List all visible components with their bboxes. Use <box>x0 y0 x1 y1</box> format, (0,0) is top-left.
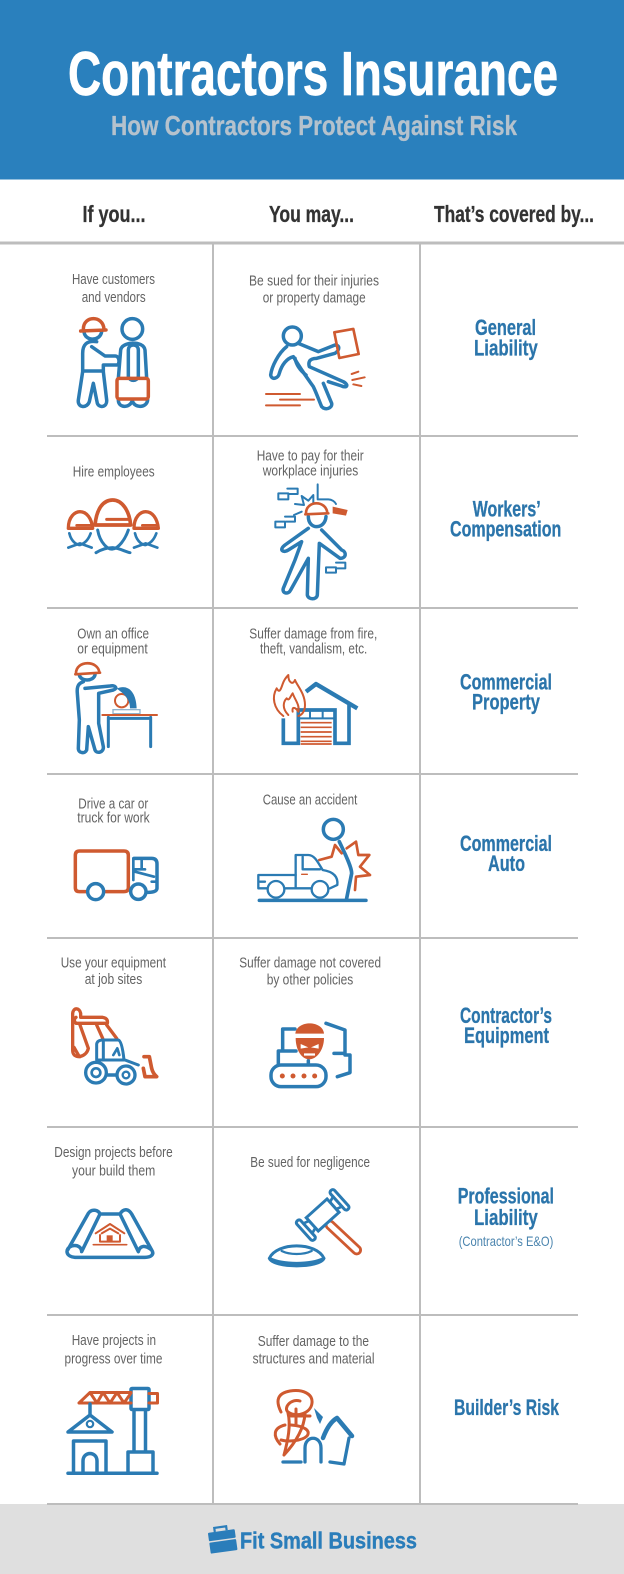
text: have projects: progress over time <box>64 1351 162 1367</box>
icon: slipping person with briefcase <box>266 327 365 409</box>
heading: contractors equipment <box>460 1003 552 1048</box>
heading: commercial auto: Commercial <box>460 831 552 856</box>
row: professional liability <box>54 1145 554 1266</box>
text: suffer damage not covered: by other policies <box>267 972 353 988</box>
icon: burning garage <box>274 675 357 744</box>
heading: professional liability: Professional <box>458 1183 554 1208</box>
heading: professional liability: Liability <box>474 1205 538 1230</box>
text: own an office: Own an office <box>77 627 149 643</box>
heading: general liability <box>474 315 538 361</box>
heading: commercial auto: Auto <box>488 851 525 876</box>
heading: builders risk: Builder’s Risk <box>454 1395 560 1420</box>
column headings: If you... <box>82 201 146 227</box>
text: use your equipment <box>61 956 166 988</box>
row: workers compensation <box>68 449 561 599</box>
heading: commercial property: Property <box>472 690 541 714</box>
icon: three helmeted workers <box>68 500 158 553</box>
text: own an office <box>77 627 149 657</box>
text: be sued: or property damage <box>263 291 366 307</box>
text: own an office: or equipment <box>77 641 148 657</box>
text: suffer damage from fire: theft, vandalism, etc. <box>260 641 367 657</box>
text: suffer damage from fire: Suffer damage from fire, <box>249 626 377 642</box>
text: have customers: and vendors <box>82 290 146 306</box>
icon: delivery truck <box>75 851 157 900</box>
text: design projects: your build them <box>72 1164 155 1180</box>
text: suffer damage not covered: Suffer damage not covered <box>239 956 381 972</box>
column headings: You may... <box>269 201 354 227</box>
icon: worker hit by brick <box>275 484 348 599</box>
text: drive a car: Drive a car or <box>78 796 148 812</box>
text: have to pay <box>257 449 364 480</box>
subtitle: How Contractors Protect Against Risk <box>111 110 517 141</box>
icon: gavel <box>269 1189 357 1266</box>
icon: thief and bulldozer <box>271 1023 350 1087</box>
footer logo text: Fit Small Business <box>240 1528 417 1554</box>
text: hire employees: Hire employees <box>73 465 155 481</box>
row: builders risk <box>64 1333 560 1473</box>
row: general liability <box>72 272 538 409</box>
heading: contractors equipment: Contractor’s <box>460 1003 552 1028</box>
text: suffer damage to structures: Suffer damage to the <box>258 1334 369 1350</box>
icon: handshake with client <box>78 319 148 406</box>
text: be sued <box>249 274 379 307</box>
heading: workers compensation: Compensation <box>450 517 561 542</box>
text: suffer damage not covered <box>239 956 381 988</box>
text: have to pay: Have to pay for their <box>257 449 364 465</box>
icon: pickup hitting pedestrian <box>258 819 370 900</box>
text: design projects: Design projects before <box>54 1145 173 1161</box>
heading: contractors equipment: Equipment <box>464 1023 549 1048</box>
heading: workers compensation <box>450 497 561 542</box>
heading: commercial property: Commercial <box>460 670 552 695</box>
heading: general liability: General <box>475 315 536 340</box>
text: be sued: Be sued for their injuries <box>249 274 379 290</box>
text: have projects <box>64 1333 162 1367</box>
text: be sued for negligence: Be sued for negligence <box>250 1155 370 1171</box>
text: use your equipment: Use your equipment <box>61 956 166 972</box>
heading: professional liability: (Contractor’s E&O) <box>459 1233 553 1249</box>
text: design projects <box>54 1145 173 1180</box>
icon: tornado and damaged house <box>275 1391 352 1464</box>
text: have to pay: workplace injuries <box>262 464 358 480</box>
column headings <box>82 201 594 227</box>
row: commercial auto <box>75 792 552 900</box>
row: commercial property <box>75 626 552 753</box>
heading: general liability: Liability <box>474 336 538 361</box>
icon: backhoe <box>73 1009 157 1084</box>
heading: commercial property <box>460 670 552 714</box>
text: suffer damage to structures <box>253 1334 374 1367</box>
text: have customers <box>72 272 155 306</box>
heading: professional liability <box>458 1183 554 1249</box>
icon: worker at table saw <box>75 663 157 753</box>
footer band <box>0 1504 624 1574</box>
text: cause an accident: Cause an accident <box>263 792 357 808</box>
heading: commercial auto <box>460 831 552 876</box>
icon: briefcase logo <box>207 1525 238 1554</box>
text: drive a car: truck for work <box>77 811 150 827</box>
row: contractors equipment <box>61 956 552 1087</box>
text: use your equipment: at job sites <box>85 972 142 988</box>
heading: workers compensation: Workers’ <box>473 497 541 522</box>
header band <box>0 0 624 180</box>
text: have projects: Have projects in <box>72 1333 156 1349</box>
icon: blueprint <box>67 1210 153 1257</box>
text: drive a car <box>77 796 150 827</box>
icon: crane over building <box>68 1388 158 1473</box>
text: suffer damage from fire <box>249 626 377 657</box>
text: suffer damage to structures: structures and material <box>253 1351 374 1367</box>
text: have customers: Have customers <box>72 272 155 288</box>
